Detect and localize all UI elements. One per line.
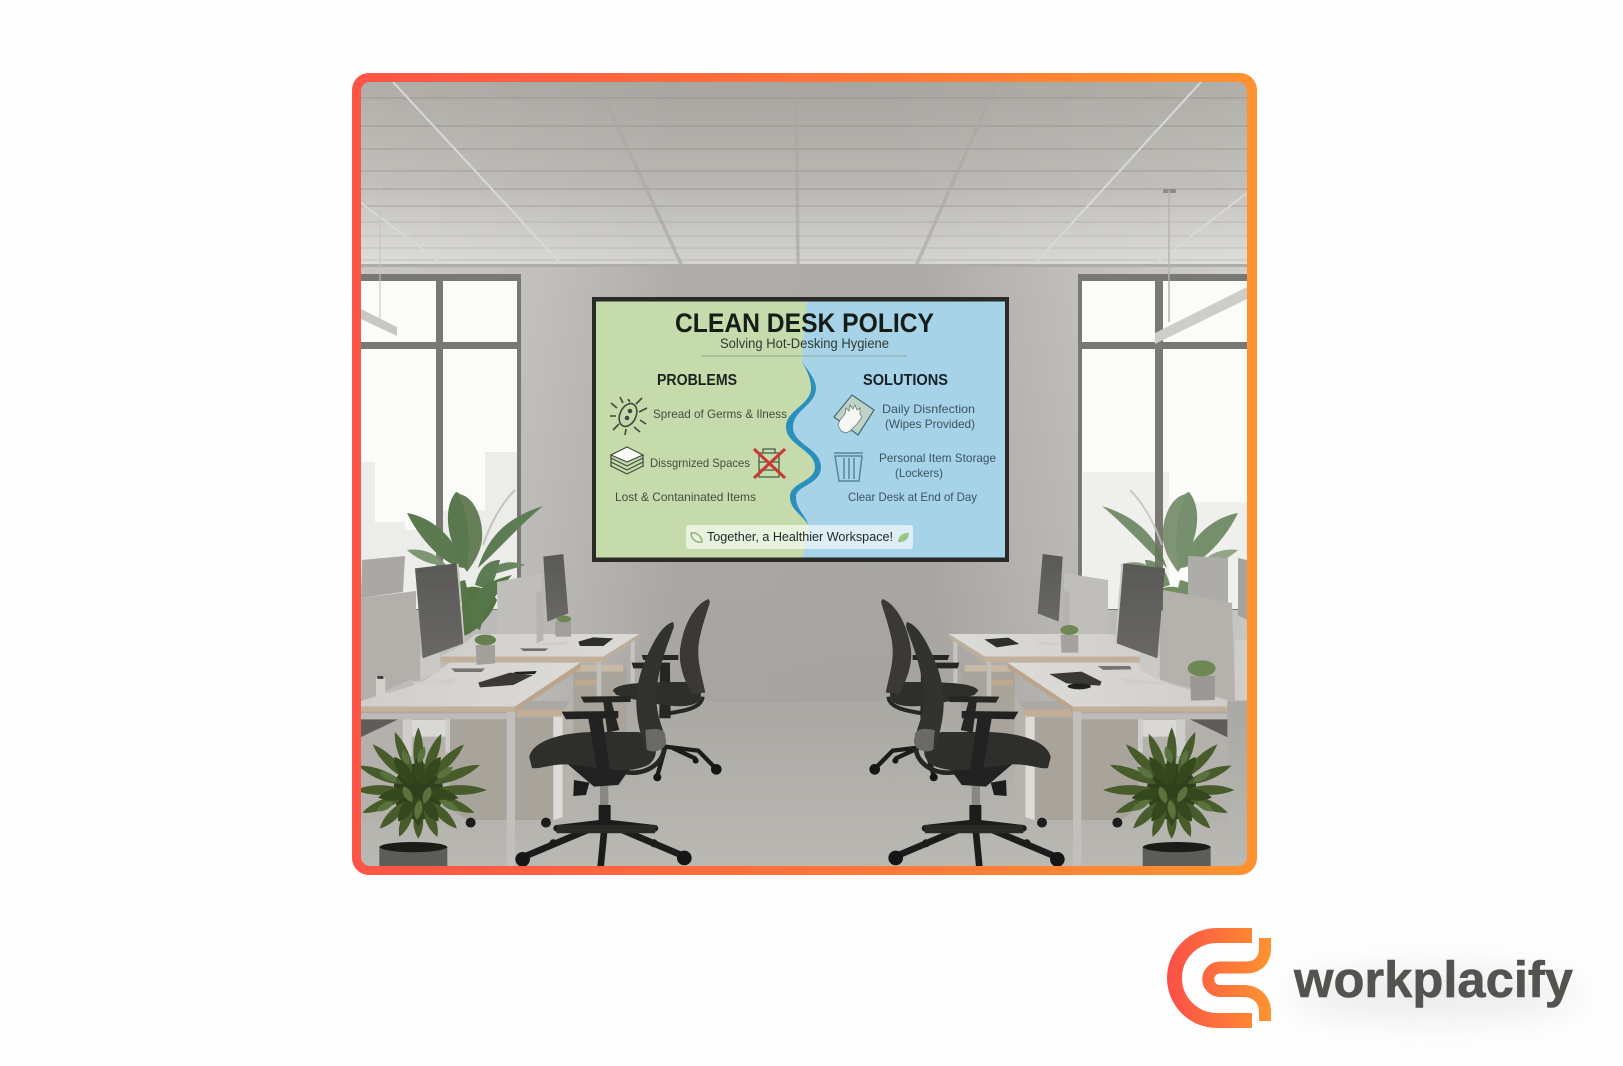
desks left bbox=[361, 634, 639, 868]
chair back right bbox=[869, 599, 978, 781]
chair front right bbox=[888, 622, 1065, 867]
partition left bbox=[361, 577, 521, 701]
keyboard back left bbox=[578, 637, 613, 646]
right pendant lamp bbox=[1155, 189, 1247, 344]
icon: bin bbox=[834, 453, 863, 481]
floor bbox=[361, 711, 1247, 866]
left pendant lamp bbox=[361, 188, 397, 336]
logo shadow bbox=[1290, 971, 1580, 1019]
chair back left bbox=[613, 599, 722, 781]
floor plant left bbox=[356, 727, 487, 870]
ceiling trim bbox=[361, 264, 1247, 267]
monitor front right bbox=[1115, 563, 1168, 684]
ceiling bbox=[361, 82, 1247, 267]
pot on back desk bbox=[476, 645, 495, 665]
skyline bbox=[361, 452, 517, 609]
screen title: CLEAN DESK POLICY bbox=[675, 308, 934, 338]
screen bezel bbox=[592, 297, 1009, 562]
icon: crossed-out locker bbox=[754, 449, 785, 478]
solution: disinfection: Daily Disnfection bbox=[882, 402, 975, 416]
screen subtitle: Solving Hot-Desking Hygiene bbox=[720, 336, 889, 351]
keyboard back right bbox=[984, 638, 1019, 647]
cup bbox=[376, 677, 385, 700]
slogan pill bbox=[686, 525, 913, 549]
logo mark bbox=[1174, 936, 1265, 1021]
blue solutions panel bbox=[786, 302, 1005, 558]
photo frame with gradient border bbox=[352, 73, 1257, 875]
monitor back left bbox=[537, 554, 570, 645]
icon: wipes and hand bbox=[834, 395, 874, 435]
floor plant right bbox=[1103, 727, 1234, 870]
tall plant left bbox=[407, 490, 543, 636]
skyline bbox=[1083, 472, 1247, 609]
problem: disorganized: Dissgrnized Spaces bbox=[650, 456, 750, 470]
keyboard front right bbox=[1049, 672, 1102, 686]
monitor front left bbox=[412, 563, 465, 684]
desks right bbox=[949, 634, 1227, 868]
back wall bbox=[361, 266, 1247, 711]
tall plant right bbox=[1102, 489, 1238, 610]
right window bbox=[1078, 274, 1247, 610]
solution: wipes note: (Wipes Provided) bbox=[885, 417, 975, 431]
problem: germs: Spread of Germs & Ilness bbox=[653, 407, 787, 421]
partition right bbox=[1064, 573, 1247, 702]
keyboard front left bbox=[478, 673, 533, 687]
left window bbox=[361, 274, 521, 610]
solutions heading: SOLUTIONS bbox=[863, 372, 948, 389]
icon: germ bbox=[610, 397, 647, 435]
desk items left bbox=[376, 616, 613, 700]
icon: paper stack bbox=[611, 447, 643, 474]
slogan pill: Together, a Healthier Workspace! bbox=[707, 530, 893, 544]
green problems panel bbox=[596, 302, 815, 558]
problems heading: PROBLEMS bbox=[657, 372, 737, 389]
gradient border bbox=[352, 73, 1257, 875]
wall screen bbox=[592, 297, 1009, 562]
baseboard bbox=[520, 701, 1247, 711]
pot front right bbox=[1190, 676, 1215, 701]
solution: clear desk: Clear Desk at End of Day bbox=[848, 490, 977, 504]
chair front left bbox=[515, 622, 692, 867]
desk items right bbox=[984, 625, 1216, 701]
solution: storage: Personal Item Storage bbox=[879, 451, 996, 465]
solution: lockers note: (Lockers) bbox=[895, 466, 943, 480]
wave divider bbox=[786, 362, 821, 525]
workplacify logo bbox=[1174, 936, 1574, 1021]
back workstation monitors behind partitions bbox=[361, 556, 1247, 620]
office scene photo bbox=[356, 82, 1247, 870]
logo wordmark: workplacify bbox=[1293, 951, 1574, 1008]
monitor back right bbox=[1036, 554, 1069, 645]
problem: lost items: Lost & Contaninated Items bbox=[615, 490, 756, 504]
